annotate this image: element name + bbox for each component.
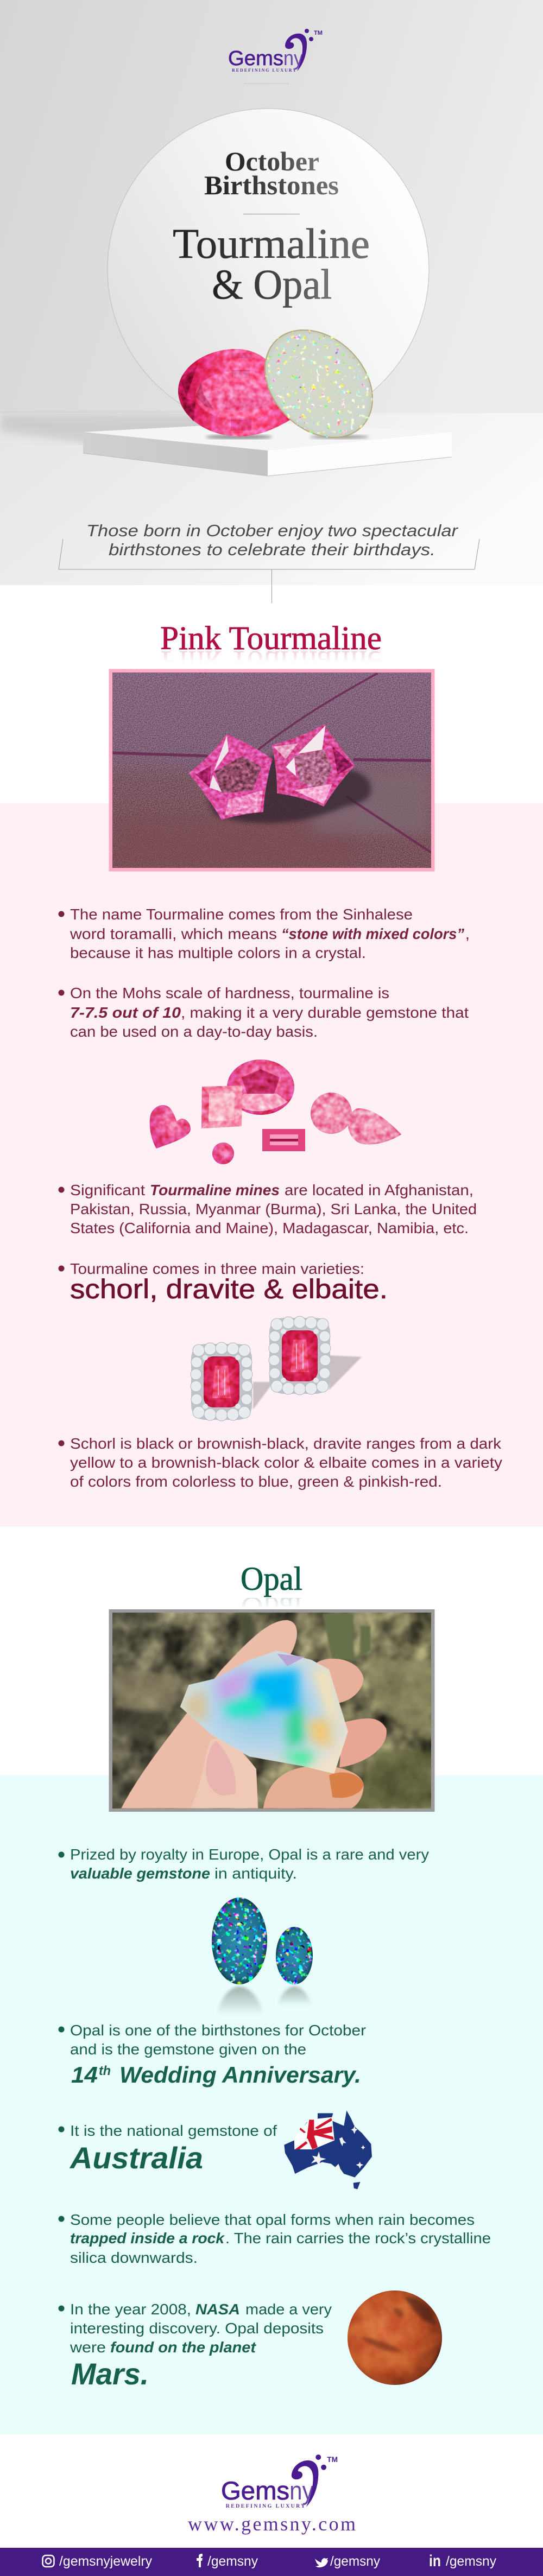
logo: Gemsny [228, 29, 323, 73]
gem: right highlights [286, 725, 326, 776]
facebook handle: /gemsny [207, 2554, 258, 2569]
cactus [322, 1613, 370, 1660]
linkedin handle: /gemsny [446, 2554, 496, 2569]
bullet: tourmaline mines: Tourmaline mines [150, 1182, 280, 1198]
bullet: name origin: word toramalli, which means [70, 925, 277, 942]
bullet: Mohs hardness: 7-7.5 out of 10 [70, 1004, 181, 1021]
bullet: 14th anniversary: th [99, 2064, 111, 2078]
gem: round [311, 1093, 352, 1134]
bullet: Mohs hardness [59, 985, 469, 1040]
gem: heart [150, 1105, 191, 1149]
ruby earrings [191, 1316, 362, 1421]
logo: Gemsny: Gems [228, 47, 283, 70]
bullet: prized by royalty: Prized by royalty in Europe, Opal is a rare and very [70, 1846, 429, 1863]
bullet: how opal forms: silica downwards. [70, 2249, 198, 2266]
bullet: name origin: because it has multiple colors in a crystal. [70, 944, 366, 961]
bullet: name origin: The name Tourmaline comes from the Sinhalese [70, 906, 413, 923]
bullet: variety colours: yellow to a brownish-black color & elbaite comes in a variety [70, 1454, 502, 1471]
footer logo: Gemsny [221, 2454, 338, 2509]
icon: facebook [197, 2554, 203, 2567]
photo: raw opal in hand [109, 1609, 434, 1812]
bullet: three varieties [59, 1260, 388, 1304]
aqua section background [0, 1775, 543, 2434]
assorted pink gems [150, 1059, 401, 1164]
footer logo: Gemsny: ny [289, 2476, 314, 2505]
title: October Birthstones: Birthstones [204, 170, 339, 200]
raw opal [180, 1651, 348, 1774]
bullet: NASA Mars discovery [59, 2301, 332, 2391]
bullet: tourmaline mines [59, 1182, 477, 1236]
bullet: NASA Mars discovery: NASA [195, 2301, 240, 2318]
bullet: prized by royalty: in antiquity. [214, 1865, 297, 1882]
bullet: how opal forms [59, 2211, 491, 2266]
opal: large [212, 1898, 267, 1984]
title: Tourmaline & Opal [173, 220, 370, 308]
title: October Birthstones: October [225, 146, 319, 176]
heading: Opal [242, 1566, 302, 1607]
bullet: national gemstone: Australia [69, 2141, 203, 2175]
pink tourmaline gem [178, 349, 293, 436]
hand [121, 1620, 387, 1809]
logo: Gemsny: TM [314, 30, 323, 36]
bullet: prized by royalty: valuable gemstone [70, 1865, 210, 1882]
bullet: 14th anniversary: Opal is one of the birthstones for October [70, 2022, 366, 2039]
title: Tourmaline & Opal: Tourmaline [173, 220, 370, 267]
bullet: NASA Mars discovery: were [70, 2339, 106, 2356]
hero floor [0, 413, 543, 585]
logo: Gemsny: REDEFINING LUXURY [232, 68, 296, 73]
white platform [83, 422, 452, 476]
heading: Pink Tourmaline: Pink Tourmaline [160, 620, 382, 657]
white disc [108, 109, 429, 430]
photo: pink tourmalines on leaf [109, 669, 434, 872]
earring: right [269, 1316, 331, 1395]
heading: Pink Tourmaline: Pink Tourmaline [160, 644, 382, 680]
gem: square [201, 1086, 242, 1128]
gem: right star [272, 724, 355, 807]
icon: instagram [42, 2555, 54, 2567]
footer logo: Gemsny: TM [327, 2456, 338, 2464]
bullet: 14th anniversary: Wedding Anniversary. [119, 2062, 361, 2088]
floor shadow [0, 414, 228, 442]
bullet: Mohs hardness: , making it a very durable gemstone that [181, 1004, 469, 1021]
bullet: how opal forms: Some people believe that opal forms when rain becomes [70, 2211, 475, 2228]
gem shadows [205, 435, 369, 439]
bullet: NASA Mars discovery: In the year 2008, [70, 2301, 191, 2318]
black opal gems [212, 1898, 313, 2015]
intro text: birthstones to celebrate their birthdays. [109, 540, 435, 559]
earring: left [191, 1342, 252, 1421]
bullet: name origin: , [465, 925, 470, 942]
social media bar [0, 2548, 543, 2576]
instagram handle: /gemsnyjewelry [59, 2554, 152, 2569]
bullet: 14th anniversary: 14 [71, 2062, 98, 2088]
bullet: name origin [59, 906, 470, 961]
bullet: how opal forms: . The rain carries the rock’s crystalline [225, 2230, 491, 2247]
logo: Gemsny: ny [283, 47, 303, 70]
bullet: NASA Mars discovery: made a very [245, 2301, 332, 2318]
icon: planet Mars [348, 2291, 442, 2385]
bullet: prized by royalty [59, 1846, 429, 1882]
gem: left star [189, 734, 273, 820]
twitter handle: /gemsny [330, 2554, 380, 2569]
intro text [86, 521, 459, 559]
heading: Opal: Opal [241, 1561, 302, 1597]
hero wall background [0, 0, 543, 414]
opal gem [243, 308, 394, 459]
bullet: NASA Mars discovery: Mars. [71, 2357, 149, 2391]
bullet: variety colours [59, 1435, 502, 1490]
intro text: Those born in October enjoy two spectacular [86, 521, 459, 540]
gem: left highlights [210, 735, 229, 792]
website url: www.gemsny.com [188, 2513, 356, 2535]
pink section background [0, 803, 543, 1527]
bullet: tourmaline mines: Significant [70, 1182, 145, 1198]
gem: cushion [227, 1059, 294, 1115]
bullet: Mohs hardness: On the Mohs scale of hardness, tourmaline is [70, 985, 389, 1001]
gem: small round [212, 1143, 234, 1164]
icon: linkedin: in [429, 2552, 441, 2570]
icon: Australia flag map [284, 2110, 372, 2189]
footer logo: Gemsny: Gems [221, 2476, 289, 2505]
gem: pear [348, 1108, 401, 1144]
bullet: variety colours: Schorl is black or brownish-black, dravite ranges from a dark [70, 1435, 502, 1452]
bullet: NASA Mars discovery: interesting discovery. Opal deposits [70, 2320, 324, 2337]
bullet: variety colours: of colors from colorless to blue, green & pinkish-red. [70, 1473, 442, 1490]
bullet: 14th anniversary: and is the gemstone given on the [70, 2041, 306, 2058]
bullet: how opal forms: trapped inside a rock [70, 2230, 225, 2247]
bullet: tourmaline mines: are located in Afghanistan, [285, 1182, 473, 1198]
opal reflections [217, 1987, 312, 2015]
bullet: three varieties: schorl, dravite & elbaite. [70, 1274, 388, 1304]
bullet: 14th anniversary [59, 2022, 366, 2088]
bullet: name origin: “stone with mixed colors” [281, 925, 464, 942]
icon: twitter [315, 2558, 328, 2567]
title: October Birthstones [204, 146, 339, 200]
bullet: Mohs hardness: can be used on a day-to-day basis. [70, 1023, 318, 1040]
hero panel [0, 0, 543, 585]
bullet: national gemstone: It is the national gemstone of [70, 2122, 277, 2139]
bullet: tourmaline mines: States (California and Maine), Madagascar, Namibia, etc. [70, 1220, 469, 1236]
bullet: three varieties: Tourmaline comes in three main varieties: [70, 1260, 364, 1277]
gem: baguette [262, 1129, 305, 1151]
bullet: national gemstone [59, 2122, 277, 2175]
opal: small [276, 1927, 313, 1984]
bullet: tourmaline mines: Pakistan, Russia, Myanmar (Burma), Sri Lanka, the United [70, 1201, 477, 1217]
bullet: NASA Mars discovery: found on the planet [110, 2339, 257, 2356]
title: Tourmaline & Opal: & Opal [212, 261, 332, 308]
heading: Opal: Opal [241, 1590, 302, 1626]
footer logo: Gemsny: REDEFINING LUXURY [226, 2503, 305, 2509]
